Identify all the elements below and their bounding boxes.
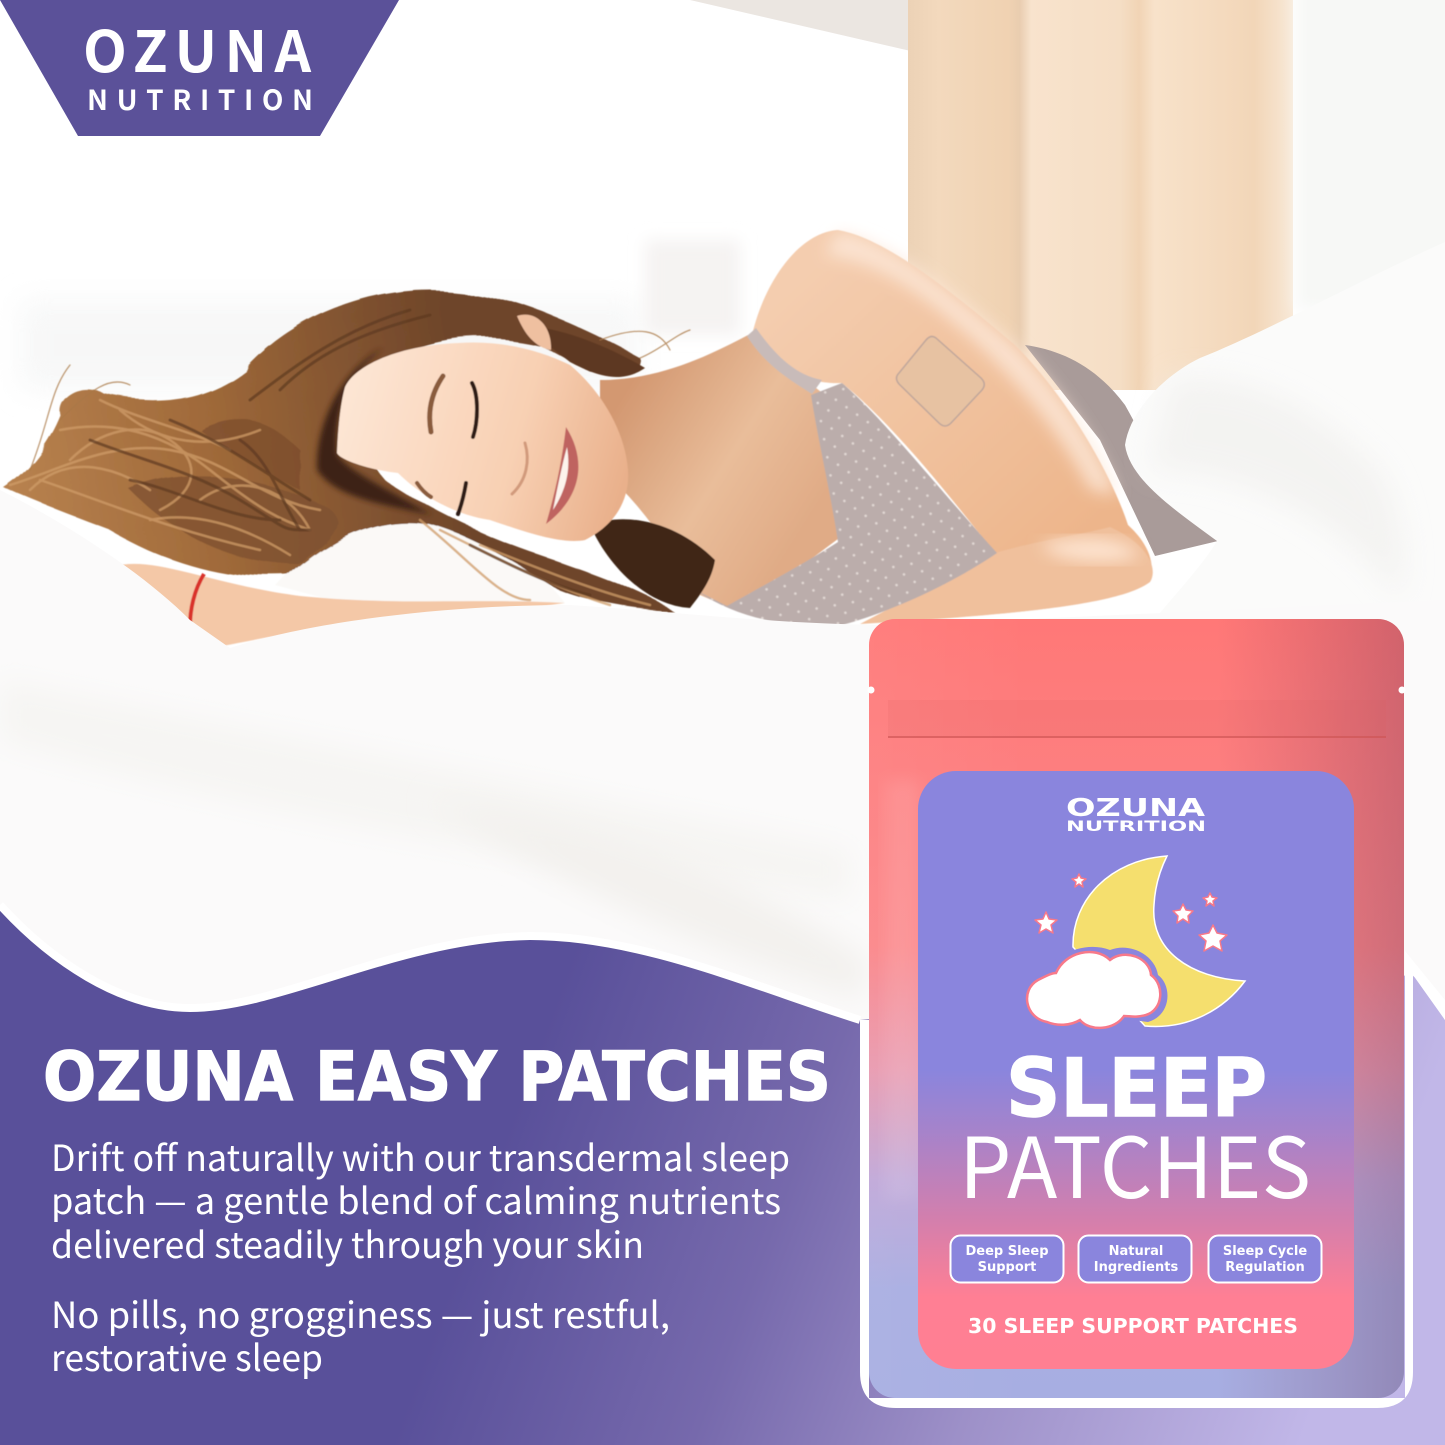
pouch body (869, 619, 1404, 1398)
badge: deep sleep (950, 1236, 1064, 1282)
label panel (918, 771, 1354, 1369)
neck and chest (600, 335, 850, 612)
dress behind arm (1025, 345, 1218, 556)
icon: stars (1035, 874, 1227, 951)
nose (512, 443, 527, 494)
dark hair shadow by temple (317, 348, 432, 515)
zipper line (888, 700, 1386, 736)
product pouch: PATCHES (959, 1102, 1311, 1223)
cloud (1027, 952, 1160, 1028)
dress front (695, 383, 997, 626)
face (337, 342, 628, 541)
icon: moon and cloud (1027, 856, 1245, 1028)
badge: natural ingredients: Natural (1109, 1244, 1163, 1259)
red bracelet (190, 574, 204, 626)
badge: sleep cycle (1208, 1236, 1322, 1282)
hair (3, 290, 672, 610)
badge: deep sleep: Support (978, 1260, 1036, 1275)
hair behind neck (590, 519, 715, 608)
pouch logo: OZUNA (1066, 793, 1206, 822)
badge: sleep cycle: Sleep Cycle (1223, 1244, 1307, 1259)
pouch logo (1066, 793, 1206, 835)
badge: natural ingredients (1078, 1236, 1192, 1282)
badge: deep sleep: Deep Sleep (965, 1244, 1049, 1259)
ear (517, 315, 551, 350)
eyes (472, 383, 477, 437)
forearm (860, 527, 1153, 624)
body text: Drift off naturally with our transdermal sleep (51, 1130, 790, 1182)
dress strap (747, 328, 822, 394)
patch on arm (896, 336, 984, 426)
product pouch (860, 619, 1445, 1408)
pillow (275, 518, 565, 605)
upper arm (752, 230, 1152, 623)
eyebrows (430, 376, 443, 432)
body text: No pills, no grogginess — just restful, (51, 1287, 670, 1339)
purple wave panel (0, 905, 1445, 1445)
white bed sheets (0, 490, 1445, 1030)
badge: sleep cycle: Regulation (1225, 1260, 1305, 1275)
hang notches (868, 686, 874, 694)
mouth (546, 427, 578, 524)
moon (1073, 856, 1245, 1026)
facial features (417, 376, 527, 514)
product name: SLEEP (1006, 1042, 1267, 1135)
badge: natural ingredients: Ingredients (1094, 1260, 1178, 1275)
body text: patch — a gentle blend of calming nutrients (51, 1173, 781, 1225)
pouch logo: NUTRITION (1066, 819, 1206, 835)
body text: restorative sleep (51, 1330, 323, 1382)
body text (51, 1130, 790, 1382)
pouch border (860, 951, 1445, 1408)
woman sleeping (3, 230, 1153, 646)
body text: delivered steadily through your skin (51, 1217, 644, 1269)
cloud shadow (1040, 947, 1167, 1022)
heading: OZUNA EASY PATCHES (43, 1038, 831, 1117)
darker locks (130, 476, 337, 565)
white duvet on the right (1125, 242, 1445, 650)
brand banner: NUTRITION (87, 79, 313, 119)
brand banner (0, 0, 399, 136)
left arm (120, 564, 565, 646)
patch count: 30 SLEEP SUPPORT PATCHES (968, 1314, 1298, 1338)
brand banner: OZUNA (83, 7, 311, 89)
hair strands (10, 310, 690, 605)
